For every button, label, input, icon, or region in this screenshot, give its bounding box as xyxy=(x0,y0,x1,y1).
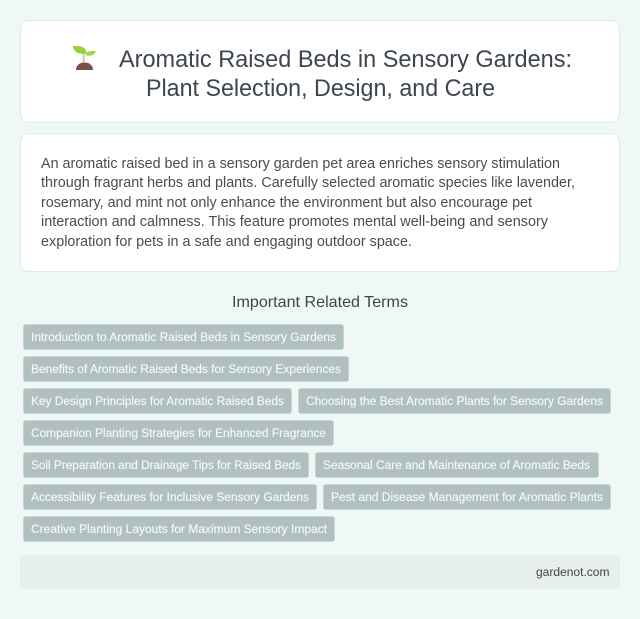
title: Aromatic Raised Beds in Sensory Gardens: xyxy=(119,46,572,73)
tag xyxy=(24,484,316,510)
tag: Key Design Principles for Aromatic Raised Beds xyxy=(31,394,284,408)
icon: seedling xyxy=(73,46,96,70)
tag xyxy=(316,452,598,478)
tag xyxy=(24,452,308,478)
title xyxy=(119,46,572,102)
heading: related terms: Important Related Terms xyxy=(232,294,408,311)
tag: Companion Planting Strategies for Enhanced Fragrance xyxy=(31,426,326,440)
tag: Choosing the Best Aromatic Plants for Sensory Gardens xyxy=(306,394,603,408)
tag xyxy=(24,388,292,414)
tag: Soil Preparation and Drainage Tips for Raised Beds xyxy=(31,458,301,472)
description text xyxy=(41,156,575,250)
description text: exploration for pets in a safe and engaging outdoor space. xyxy=(41,234,412,250)
description text: interaction and calmness. This feature promotes mental well-being and sensory xyxy=(41,214,549,230)
tag: Pest and Disease Management for Aromatic Plants xyxy=(331,490,603,504)
title: Plant Selection, Design, and Care xyxy=(146,75,495,102)
footer xyxy=(20,555,620,589)
tag: Creative Planting Layouts for Maximum Sensory Impact xyxy=(31,522,328,536)
tag: Benefits of Aromatic Raised Beds for Sensory Experiences xyxy=(31,362,341,376)
description text: An aromatic raised bed in a sensory garden pet area enriches sensory stimulation xyxy=(41,156,560,172)
description text: through fragrant herbs and plants. Carefully selected aromatic species like lavender, xyxy=(41,175,575,191)
tag: Seasonal Care and Maintenance of Aromatic Beds xyxy=(323,458,590,472)
tag xyxy=(24,516,334,542)
footer: gardenot.com xyxy=(536,565,610,579)
tag list xyxy=(24,324,610,542)
panel: title card xyxy=(20,20,620,122)
tag xyxy=(298,388,610,414)
tag: Accessibility Features for Inclusive Sensory Gardens xyxy=(31,490,309,504)
tag xyxy=(24,420,334,446)
tag xyxy=(24,324,344,350)
description text: rosemary, and mint not only enhance the environment but also encourage pet xyxy=(41,195,532,211)
tag: Introduction to Aromatic Raised Beds in Sensory Gardens xyxy=(31,330,336,344)
panel: description xyxy=(20,134,620,272)
tag xyxy=(24,356,348,382)
tag xyxy=(324,484,610,510)
